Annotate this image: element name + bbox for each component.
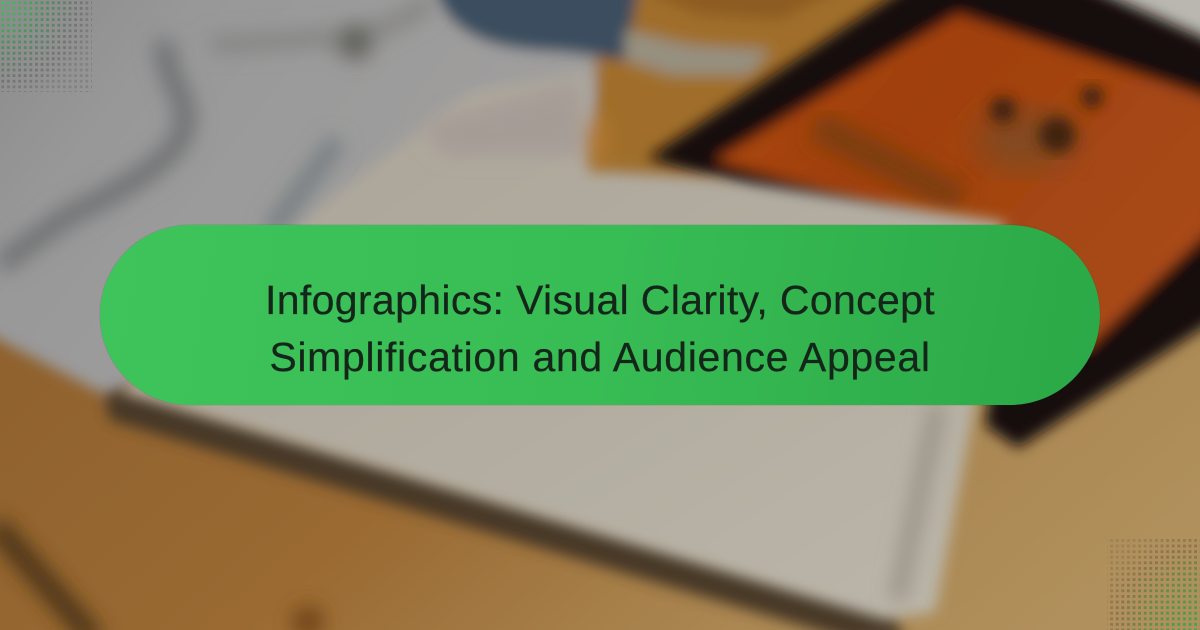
orange spot at notebook edge [589, 112, 605, 168]
notebook page edge [897, 405, 938, 600]
pen on paper [270, 140, 338, 232]
tablet frame [648, 0, 1200, 448]
smudge on paper [337, 24, 373, 60]
notebook [120, 72, 1005, 620]
pale top of notebook [420, 80, 580, 155]
halftone corner: bottom right [1107, 537, 1200, 630]
glass [625, 30, 770, 75]
title [265, 277, 935, 380]
blue object [432, 0, 640, 60]
top paper shading [210, 0, 430, 44]
tablet screen [715, 14, 1200, 350]
green title pill [100, 225, 1100, 405]
top right white [1040, 0, 1200, 60]
title: Infographics: Visual Clarity, Concept [265, 277, 935, 323]
dark wood streak [0, 525, 95, 630]
grey paper [0, 0, 640, 400]
paper squiggle [0, 40, 186, 265]
paw smudge on tablet [975, 110, 1075, 170]
title: Simplification and Audience Appeal [269, 334, 931, 380]
halftone corner: top left [0, 0, 92, 92]
upper wood [585, 0, 945, 170]
notebook shadow [104, 388, 905, 630]
paw dots on tablet [990, 86, 1103, 153]
tablet dark band [815, 125, 960, 200]
